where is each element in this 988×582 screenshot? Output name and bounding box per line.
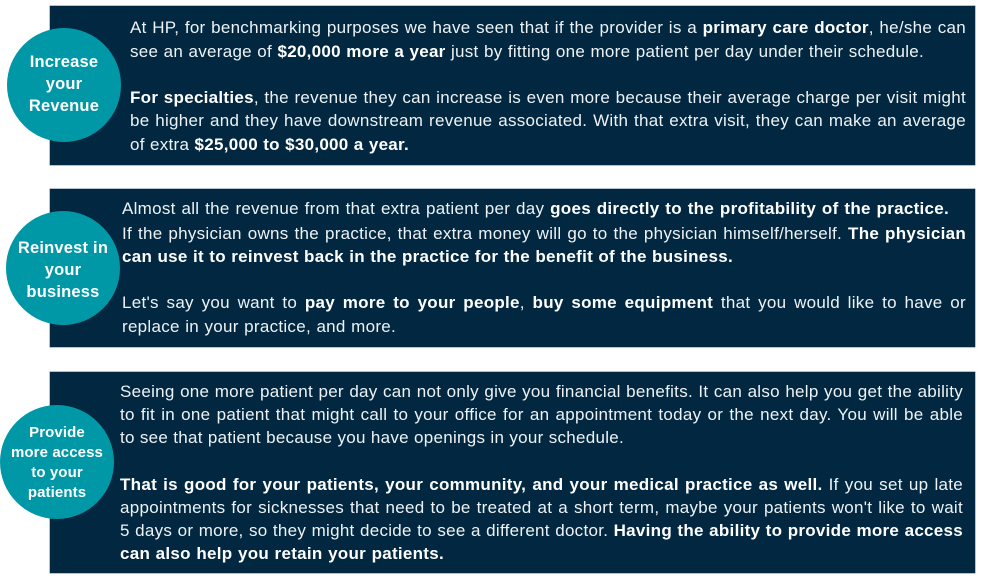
text block: reinvestment details: Almost all the revenue from that extra patient per day goes directly to the profitability of the practice. (122, 199, 949, 218)
text block: access details: That is good for your patients, your community, and your medical practice as well. If you set up late (120, 475, 963, 494)
text block: reinvestment details: If the physician owns the practice, that extra money will go to the physician himself/herself. The physician (122, 224, 966, 243)
text block: access details: to see that patient because you have openings in your schedule. (120, 428, 624, 447)
text block: revenue details: see an average of $20,000 more a year just by fitting one more patient per day under their schedule. (130, 42, 924, 61)
text block: revenue details: be higher and they have downstream revenue associated. With that extra visit, they can make an average (130, 111, 966, 130)
text block: reinvestment details: Let's say you want to pay more to your people, buy some equipment that you would like to have or (122, 293, 966, 312)
text block: revenue details: of extra $25,000 to $30,000 a year. (130, 135, 409, 154)
panel: reinvest in your business (50, 189, 975, 347)
badge: provide more access to your patients: Provide (29, 424, 85, 441)
badge: reinvest in your business: Reinvest in (18, 239, 108, 257)
badge: provide more access to your patients: more access (11, 444, 103, 461)
badge: increase your revenue: Increase (30, 53, 98, 71)
badge: provide more access to your patients: patients (28, 484, 86, 501)
text block: access details: to fit in one patient that might call to your office for an appointment today or the next day. You will be able (120, 405, 963, 424)
panel: increase your revenue (50, 6, 975, 165)
badge: reinvest in your business (6, 211, 120, 325)
badge: reinvest in your business: business (26, 283, 100, 301)
text block: revenue details: For specialties, the revenue they can increase is even more because their average charge per visit might (130, 88, 966, 107)
text block: access details (120, 382, 963, 563)
badge: reinvest in your business: your (45, 261, 81, 279)
text block: revenue details (130, 18, 966, 154)
badge: increase your revenue (7, 28, 121, 142)
text block: access details: 5 days or more, so they might decide to see a different doctor. Having the ability to provide more access (120, 521, 963, 540)
text block: reinvestment details: can use it to reinvest back in the practice for the benefit of the business. (122, 247, 733, 266)
badge: increase your revenue: Revenue (29, 97, 99, 115)
badge: increase your revenue: your (46, 75, 82, 93)
text block: reinvestment details: replace in your practice, and more. (122, 317, 396, 336)
badge: provide more access to your patients: to your (31, 464, 83, 481)
panel: provide more access (50, 372, 975, 573)
text block: access details: can also help you retain your patients. (120, 544, 444, 563)
text block: revenue details: At HP, for benchmarking purposes we have seen that if the provider is a primary care doctor, he/she can (130, 18, 966, 37)
text block: access details: appointments for sicknesses that need to be treated at a short term, maybe your patients won't like to wait (120, 498, 963, 517)
badge: provide more access to your patients (0, 405, 114, 519)
text block: access details: Seeing one more patient per day can not only give you financial benefits. It can also help you get the ability (120, 382, 963, 401)
text block: reinvestment details (122, 199, 966, 336)
